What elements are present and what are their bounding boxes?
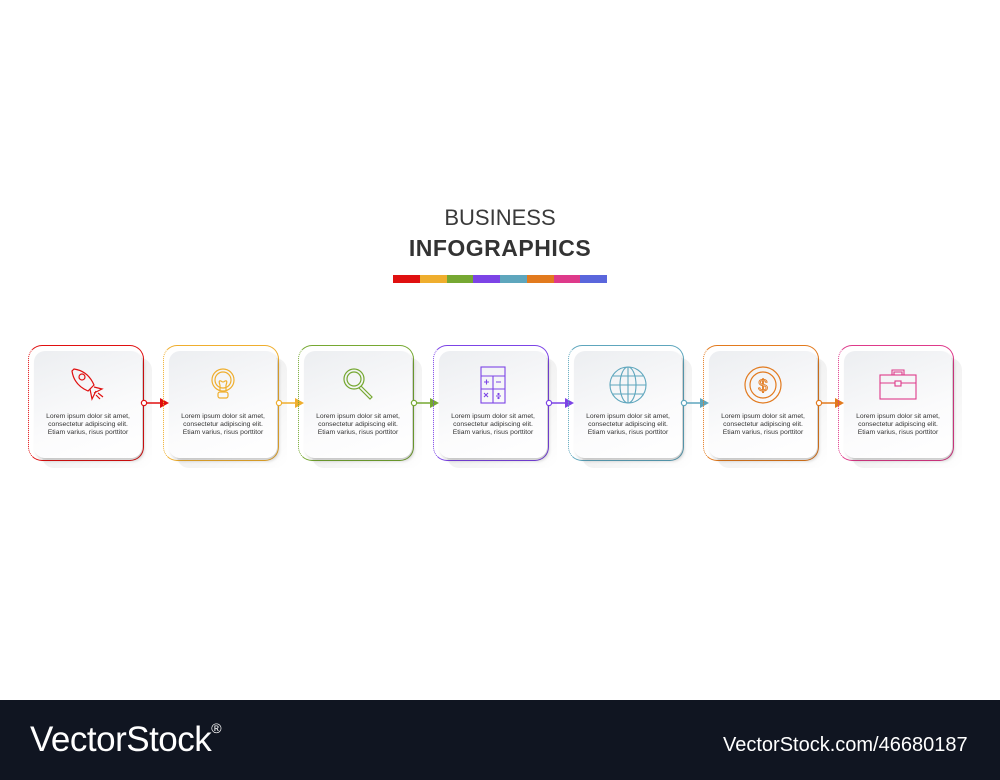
title: INFOGRAPHICS	[409, 235, 591, 261]
title: BUSINESS	[444, 205, 556, 230]
arrow	[680, 398, 709, 408]
icon: magnifier	[343, 368, 373, 400]
icon: rocket	[71, 368, 104, 401]
step 2	[163, 345, 304, 468]
arrow	[140, 398, 169, 408]
step 3: consectetur adipiscing elit.	[318, 421, 398, 428]
icon: coin: $	[758, 376, 768, 395]
step 7: Etiam varius, risus porttitor	[858, 429, 938, 436]
step 1: Lorem ipsum dolor sit amet,	[46, 413, 130, 420]
step 1: Etiam varius, risus porttitor	[48, 429, 128, 436]
step 3: Lorem ipsum dolor sit amet,	[316, 413, 400, 420]
step 7: Lorem ipsum dolor sit amet,	[856, 413, 940, 420]
step 6: Etiam varius, risus porttitor	[723, 429, 803, 436]
arrow	[410, 398, 439, 408]
step 3: Etiam varius, risus porttitor	[318, 429, 398, 436]
footer band	[0, 700, 1000, 780]
arrow	[546, 398, 574, 408]
footer logo: VectorStock®	[30, 720, 221, 759]
icon: briefcase	[879, 370, 917, 400]
step 5: Lorem ipsum dolor sit amet,	[586, 413, 670, 420]
step 6	[703, 345, 844, 468]
step 5	[568, 345, 709, 468]
icon: coin	[744, 366, 782, 404]
arrow	[276, 398, 304, 408]
step 4: Lorem ipsum dolor sit amet,	[451, 413, 535, 420]
step 1: consectetur adipiscing elit.	[48, 421, 128, 428]
arrow	[816, 398, 844, 408]
step 6: consectetur adipiscing elit.	[723, 421, 803, 428]
icon: bulb	[211, 368, 235, 399]
title	[409, 205, 591, 261]
step 6: Lorem ipsum dolor sit amet,	[721, 413, 805, 420]
step 4	[433, 345, 574, 468]
icon: globe	[609, 366, 647, 404]
step 7: consectetur adipiscing elit.	[858, 421, 938, 428]
step 2: Lorem ipsum dolor sit amet,	[181, 413, 265, 420]
step 4: consectetur adipiscing elit.	[453, 421, 533, 428]
step 2: consectetur adipiscing elit.	[183, 421, 263, 428]
step 1	[28, 345, 169, 468]
step 3	[298, 345, 439, 468]
icon: calculator	[480, 366, 506, 404]
step 5: consectetur adipiscing elit.	[588, 421, 668, 428]
footer url: VectorStock.com/46680187	[723, 734, 968, 756]
step 2: Etiam varius, risus porttitor	[183, 429, 263, 436]
color bar	[393, 275, 607, 283]
step 7	[838, 345, 962, 468]
step 4: Etiam varius, risus porttitor	[453, 429, 533, 436]
step 5: Etiam varius, risus porttitor	[588, 429, 668, 436]
